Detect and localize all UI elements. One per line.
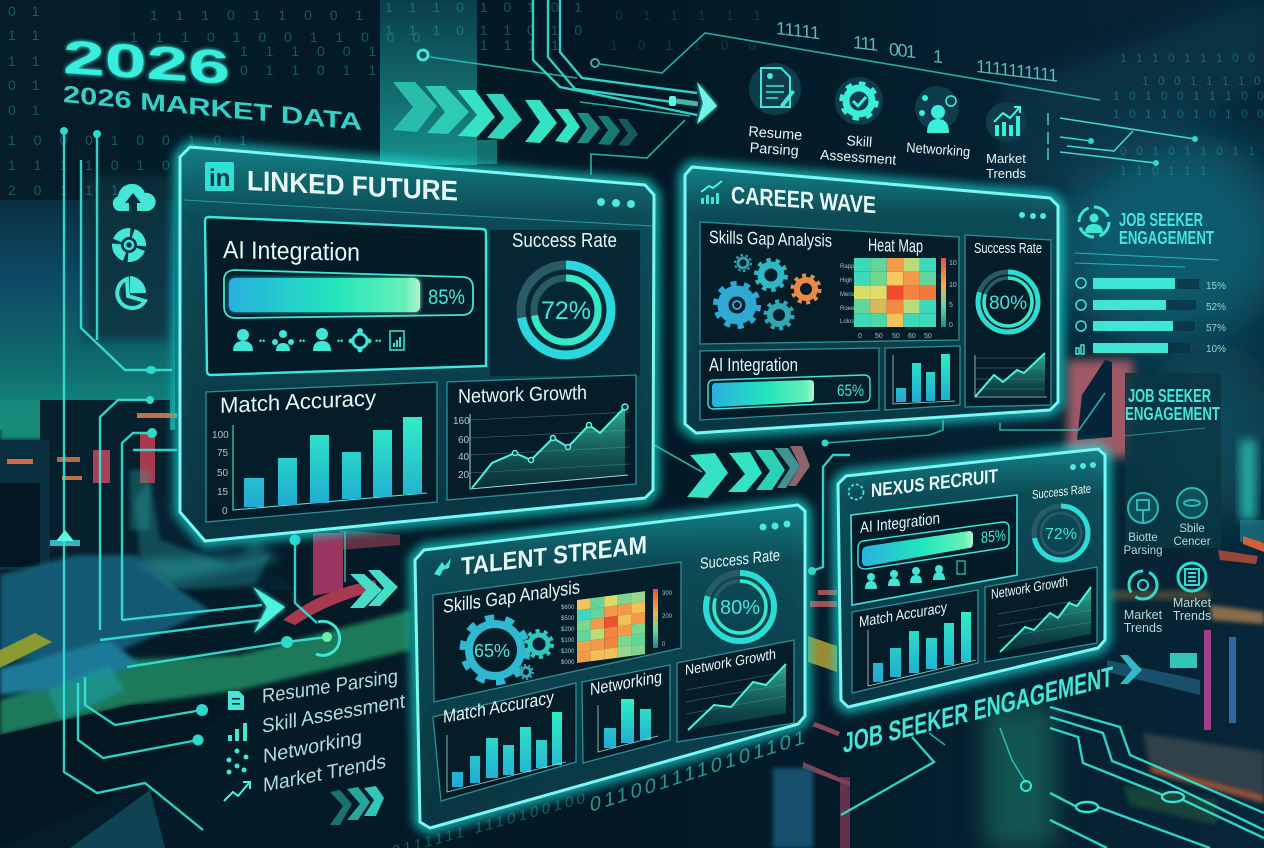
heading: nexus recruit: NEXUS RECRUIT — [871, 466, 998, 502]
label: market trends right: Market — [1173, 596, 1211, 610]
bar chart: networking — [582, 665, 670, 763]
heading: linked future: LINKED FUTURE — [247, 165, 458, 207]
panel: nexus recruit — [838, 449, 1105, 707]
icon: market trends left — [1129, 571, 1157, 599]
bars: 52% — [1206, 302, 1226, 313]
chart: heat map: 50 — [924, 333, 932, 340]
chart: heat map: $600 — [561, 605, 575, 611]
heading: career wave: CAREER WAVE — [731, 182, 876, 219]
chart: heat map: Roeep — [840, 306, 858, 312]
icon: gear 65% — [463, 618, 552, 682]
window dots — [760, 520, 790, 530]
icon row: workflow: •• — [299, 336, 305, 346]
chart: heat map: 0 — [858, 333, 862, 340]
label: resume parsing: Parsing — [749, 140, 799, 160]
progress bar: 85%: 85% — [428, 286, 465, 309]
binary rain top left: 1 1 1 0 1 1 0 0 1 — [150, 7, 370, 23]
progress bar: 85% — [224, 270, 473, 318]
binary rain top left: 1 1 1 0 1 1 0 1 0 — [385, 22, 588, 38]
line chart: network growth: 40 — [458, 452, 470, 463]
chevrons: middle left — [350, 570, 398, 608]
bar chart: match accuracy: 50 — [217, 468, 229, 479]
chart: heat map: Mens — [840, 292, 855, 298]
card: ai integration 65%: 65% — [837, 381, 864, 400]
chart: heat map: 0 — [662, 642, 666, 648]
binary rain top left: 2 0 1 1 1 — [8, 182, 126, 198]
binary rain top right — [1113, 51, 1264, 178]
link: talent stream to nexus — [808, 440, 850, 575]
card: skills gap analysis — [433, 562, 681, 702]
bars: 10% — [1206, 344, 1226, 355]
binary rain top left: 0 1 — [8, 102, 45, 118]
icon: skill assessment — [835, 77, 883, 125]
success rate: 72% ring — [1032, 482, 1091, 560]
chart: heat map: $500 — [561, 616, 575, 622]
label: networking: Networking — [263, 726, 362, 768]
icon: trend arrow — [224, 782, 250, 801]
binary rain top left: 0 1 — [8, 3, 45, 19]
heading: talent stream: TALENT STREAM — [461, 531, 647, 581]
icon: gears — [716, 255, 820, 328]
label: biotte parsing: Parsing — [1124, 545, 1162, 557]
circuit lines: bottom right — [841, 707, 1264, 848]
label: biotte parsing: Biotte — [1128, 532, 1158, 544]
icon: resume — [228, 691, 244, 710]
label: market trends right: Trends — [1173, 609, 1211, 623]
binary text top right: 111 — [853, 32, 878, 55]
feature list: bottom left — [224, 666, 405, 801]
window dots — [597, 198, 635, 208]
binary text top right: 001 — [889, 39, 916, 62]
binary rain top left: 1 1 — [8, 27, 45, 43]
subtitle: 2026 market data: 2026 MARKET DATA — [63, 81, 362, 136]
label: skill assessment: Assessment — [820, 146, 897, 168]
chevrons: lower right — [1120, 655, 1142, 684]
icon: linkedin badge: in — [209, 165, 230, 192]
line chart: network growth: Network Growth — [458, 382, 587, 408]
binary rain top left — [8, 0, 769, 198]
card: ai integration 65%: AI Integration — [709, 355, 798, 375]
success rate: 72% ring: Success Rate — [1032, 482, 1091, 502]
success rate: 80% ring — [700, 546, 780, 641]
side panel: job seeker engagement secondary — [1124, 386, 1220, 635]
card: ai integration — [205, 217, 486, 375]
chart: heat map: Lolos — [840, 319, 854, 325]
bar chart: match accuracy: 75 — [217, 448, 229, 459]
icon row: workflow — [233, 328, 404, 352]
card: skills gap analysis — [700, 222, 959, 344]
chart: heat map: 50 — [875, 333, 883, 340]
binary rain top left: 1 0 1 1 0 0 — [610, 37, 764, 53]
bar chart: match accuracy — [433, 683, 576, 801]
chart: heat map: $100 — [561, 638, 575, 644]
window dots — [1070, 462, 1096, 470]
card: success rate 80%: Success Rate — [974, 241, 1042, 257]
binary text bottom: 0110011110101101 — [590, 726, 805, 817]
binary rain top right: 0 0 1 0 1 1 0 1 1 — [1120, 144, 1258, 158]
icon: gear 65%: 65% — [474, 641, 510, 661]
binary text top right — [776, 18, 1058, 86]
panel: linked future — [180, 147, 654, 541]
chart: heat map: 50 — [892, 333, 900, 340]
icon: nexus — [848, 484, 864, 500]
left city — [0, 400, 60, 440]
binary rain top left: 1 1 — [8, 53, 45, 69]
icon: skill bars — [228, 723, 247, 741]
icon group: top feature icons — [747, 63, 1026, 181]
icon: cloud upload — [113, 184, 156, 211]
icon row: workflow: •• — [375, 336, 381, 346]
card: skills gap analysis: Skills Gap Analysis — [443, 577, 580, 618]
icon row: workflow — [865, 561, 965, 589]
icon row: workflow: •• — [337, 336, 343, 346]
binary rain top left: 0 1 — [8, 77, 45, 93]
binary rain top left: 1 1 1 0 0 1 — [240, 43, 383, 59]
card: success rate 80%: 80% — [989, 293, 1027, 314]
binary rain top left: 1 1 1 1 — [480, 37, 565, 53]
line chart: network growth — [677, 640, 794, 742]
panel: career wave — [685, 167, 1058, 433]
chart: heat map — [561, 589, 673, 666]
success rate: 80% ring: Success Rate — [700, 546, 780, 573]
line chart: network growth — [447, 375, 636, 500]
binary text top right: 11111 — [776, 18, 820, 43]
icon row: workflow: •• — [259, 336, 265, 346]
card: ai integration: 85% — [981, 527, 1006, 547]
bar chart: match accuracy — [852, 590, 978, 693]
chart: heat map: $200 — [561, 649, 575, 655]
chart: heat map: 0 — [949, 322, 953, 329]
icon: stream — [434, 558, 451, 576]
label: resume parsing: Resume Parsing — [262, 666, 398, 708]
heading: job seeker engagement: ENGAGEMENT — [1119, 228, 1214, 248]
card: success rate 80% — [965, 235, 1051, 407]
icon: linkedin badge — [205, 162, 234, 192]
bar chart: match accuracy: 0 — [222, 506, 228, 517]
chart: heat map: High — [840, 278, 852, 284]
binary rain top left: 0 1 1 0 1 1 — [240, 62, 383, 78]
binary text top right: 1111111111 — [976, 56, 1058, 86]
left verticals — [64, 133, 203, 830]
panel: talent stream — [415, 505, 805, 828]
success rate: 72% ring — [512, 230, 617, 355]
binary rain top right: 1 1 0 1 1 1 — [1120, 164, 1210, 178]
label: market trends left: Market — [1124, 608, 1162, 622]
bars: 57% — [1206, 323, 1226, 334]
bars — [1076, 278, 1226, 355]
chart: heat map: 300 — [662, 591, 673, 597]
line chart: network growth: 160 — [453, 416, 470, 427]
bar chart: match accuracy — [206, 382, 437, 522]
chart: heat map: 10 — [949, 282, 957, 289]
line chart: network growth: Network Growth — [685, 647, 776, 679]
card: ai integration — [851, 495, 1017, 605]
bar chart: match accuracy: 15 — [217, 487, 229, 498]
chevrons: lower left — [330, 786, 384, 825]
chart: heat map: 60 — [908, 333, 916, 340]
success rate: 72% ring: 72% — [541, 297, 591, 325]
right small connector lines — [1048, 113, 1198, 166]
binary rain top left: 1 0 0 0 1 0 0 1 0 1 — [8, 132, 254, 148]
heading: ENGAGEMENT — [1125, 404, 1220, 424]
icon: resume parsing — [749, 63, 801, 115]
label: networking: Networking — [906, 139, 971, 159]
binary rain top left: 0 1 1 1 1 1 — [615, 7, 769, 23]
label: market trends: Market Trends — [263, 751, 386, 797]
icon: biotte parsing — [1128, 493, 1158, 523]
binary text top right: 1 — [933, 46, 943, 67]
line chart: network growth — [985, 567, 1097, 662]
bar chart: match accuracy: Match Accuracy — [220, 385, 376, 418]
chart: heat map: 5 — [949, 302, 953, 309]
binary rain top left: 1 1 1 0 1 0 0 1 1 0 0 0 — [130, 29, 427, 45]
card: ai integration 65% — [700, 348, 879, 420]
label: skill assessment: Skill — [846, 132, 873, 150]
line chart: network growth: Network Growth — [991, 573, 1068, 602]
label: skill assessment: Skill Assessment — [262, 690, 405, 738]
bar chart: match accuracy: Match Accuracy — [443, 687, 555, 727]
card: skills gap analysis: Skills Gap Analysis — [709, 227, 832, 251]
icon: pie chart — [117, 276, 146, 308]
heading: job seeker engagement: JOB SEEKER — [1119, 210, 1203, 230]
icon: networking — [915, 86, 959, 133]
heading: heat map: Heat Map — [868, 235, 923, 256]
label: market trends left: Trends — [1124, 621, 1162, 635]
chart: heat map: 200 — [662, 614, 673, 620]
link: career wave to nexus — [825, 393, 1105, 443]
title: 2026: 2026 — [63, 30, 230, 94]
line chart: network growth: 20 — [458, 470, 470, 481]
bars: 15% — [1206, 281, 1226, 292]
chart: heat map: Rapp — [840, 264, 855, 270]
icon: growth chart — [701, 181, 722, 204]
success rate: 80% ring: 80% — [720, 597, 760, 619]
arrow: lower left connector — [78, 532, 345, 758]
binary rain top left: 1 1 1 1 0 1 0 1 — [8, 157, 203, 173]
icon: target ring — [113, 229, 145, 261]
panel: job seeker engagement bars — [1075, 207, 1226, 355]
mini bar chart — [885, 346, 960, 410]
icon: market trends — [986, 102, 1026, 142]
heading: job seeker engagement large: JOB SEEKER ENGAGEMENT — [843, 661, 1113, 760]
chart: heat map: 10 — [949, 260, 957, 267]
label: sbile cencer: Cencer — [1173, 536, 1211, 548]
icon: network nodes — [226, 748, 248, 774]
heading: JOB SEEKER — [1128, 386, 1211, 406]
bar chart: networking: Networking — [590, 666, 662, 699]
chevrons: between career wave and nexus — [654, 445, 810, 498]
success rate: 72% ring: 72% — [1045, 526, 1077, 543]
label: market trends: Trends — [986, 166, 1026, 181]
mini line chart — [975, 353, 1047, 397]
card: ai integration: AI Integration — [860, 509, 940, 537]
chart: heat map: $000 — [561, 660, 575, 666]
label: AI Integration — [223, 236, 360, 267]
line chart: network growth: 60 — [458, 435, 470, 446]
bar chart: match accuracy: Match Accuracy — [859, 599, 947, 631]
chart: heat map: $200 — [561, 627, 575, 633]
window dots — [1019, 212, 1046, 219]
label: sbile cencer: Sbile — [1179, 523, 1205, 535]
chevron arrow flow to top icons — [393, 82, 717, 146]
icon group: left sidebar — [113, 184, 156, 308]
bar chart: match accuracy: 100 — [212, 430, 229, 441]
icon: engagement person — [1079, 207, 1109, 237]
top-right dark tone — [1000, 0, 1264, 190]
label: resume parsing: Resume — [748, 124, 803, 144]
success rate: 72% ring: Success Rate — [512, 230, 617, 252]
chart: heat map — [840, 258, 957, 340]
binary text bottom — [380, 726, 805, 848]
label: market trends: Market — [986, 151, 1026, 166]
icon: sbile cencer — [1177, 488, 1207, 518]
icon: market trends right — [1178, 563, 1206, 591]
